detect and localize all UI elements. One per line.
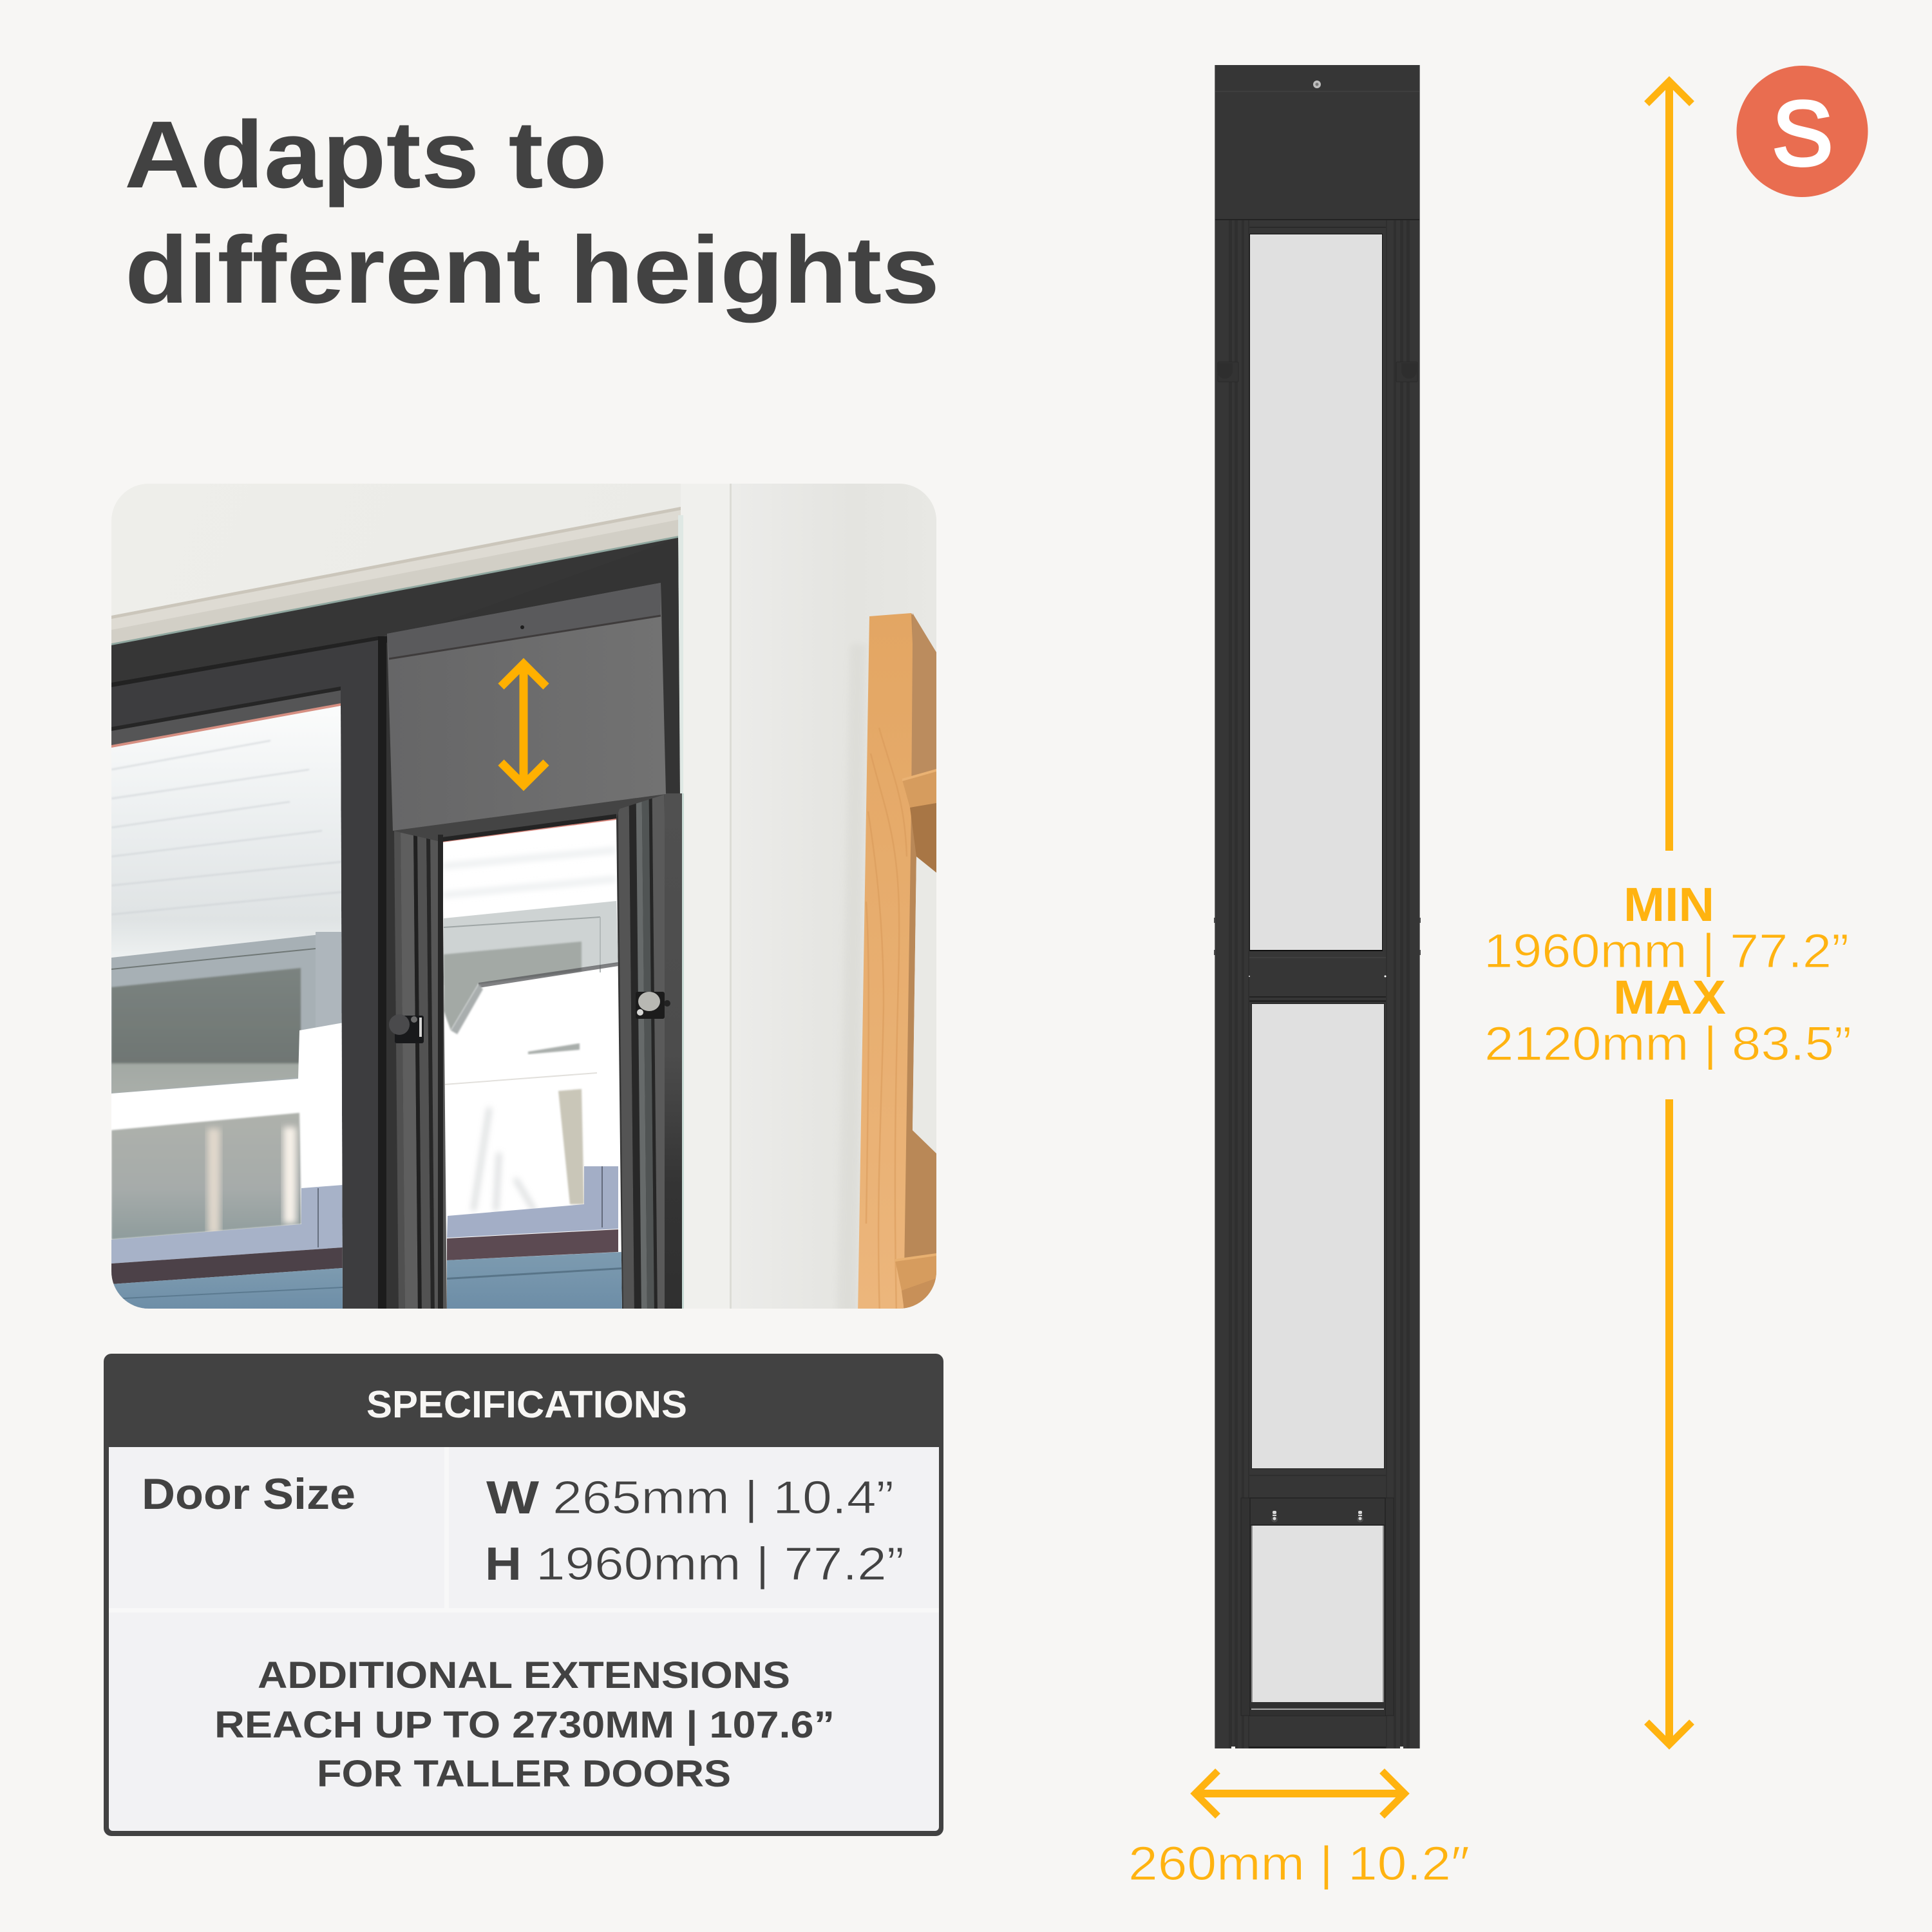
height spec: 1960mm | 77.2” [536, 1539, 904, 1590]
height dimensions: 1960mm | 77.2” [1484, 924, 1849, 978]
right knob [636, 992, 670, 1019]
screw [1313, 80, 1321, 88]
height dimensions: MIN [1624, 878, 1714, 931]
left mullion dark bar [378, 636, 387, 1315]
right rail [618, 795, 665, 1309]
right window glass and reflection [443, 819, 622, 1309]
bottom rail [1231, 1747, 1403, 1748]
height dimensions [1484, 878, 1852, 1070]
width arrow [1195, 1771, 1405, 1816]
title [124, 102, 940, 323]
orange double arrow on photo [501, 664, 546, 785]
rail grooves [1229, 220, 1410, 1748]
right glass edge [442, 817, 616, 842]
product: full-height pet door [1214, 65, 1421, 1748]
right knob [1396, 362, 1417, 382]
wooden ladder shelf [837, 613, 936, 1315]
table heading: SPECIFICATIONS [366, 1383, 687, 1426]
height arrow [1647, 81, 1692, 1745]
right pet door frame [386, 538, 683, 1315]
specifications table [104, 1354, 943, 1836]
left window glass and reflection [111, 702, 345, 1320]
photo: pet door installed in a sliding door [111, 484, 936, 1321]
door size label: Door Size [142, 1470, 355, 1519]
left rail [394, 831, 447, 1309]
lower glass panel [1251, 1003, 1385, 1469]
flap screws [1271, 1511, 1363, 1522]
width dimension: 260mm | 10.2″ [1128, 1837, 1470, 1890]
size badge [1736, 66, 1868, 197]
adjustable hood [387, 583, 666, 831]
extensions note: ADDITIONAL EXTENSIONS [258, 1654, 790, 1696]
height dimensions: MAX [1613, 971, 1726, 1024]
title: different heights [125, 217, 940, 323]
upper glass panel [1249, 234, 1383, 951]
extensions note: FOR TALLER DOORS [317, 1753, 731, 1795]
height dimensions: 2120mm | 83.5” [1484, 1017, 1852, 1070]
size badge: S [1772, 82, 1833, 185]
height spec: H [485, 1539, 522, 1590]
header above pet door glass [393, 794, 666, 841]
extensions note [214, 1654, 835, 1795]
upper header lines [1249, 227, 1386, 228]
left glass top edge [111, 703, 341, 748]
left knob [389, 1014, 424, 1043]
width spec: W [486, 1472, 539, 1524]
pet flap [1241, 1498, 1394, 1716]
middle connector [1249, 957, 1386, 1002]
width spec: 265mm | 10.4” [553, 1472, 894, 1524]
title: Adapts to [124, 102, 607, 208]
extensions note: REACH UP TO 2730MM | 107.6” [214, 1704, 835, 1746]
left knob [1217, 362, 1238, 382]
edge clips [1214, 918, 1421, 955]
